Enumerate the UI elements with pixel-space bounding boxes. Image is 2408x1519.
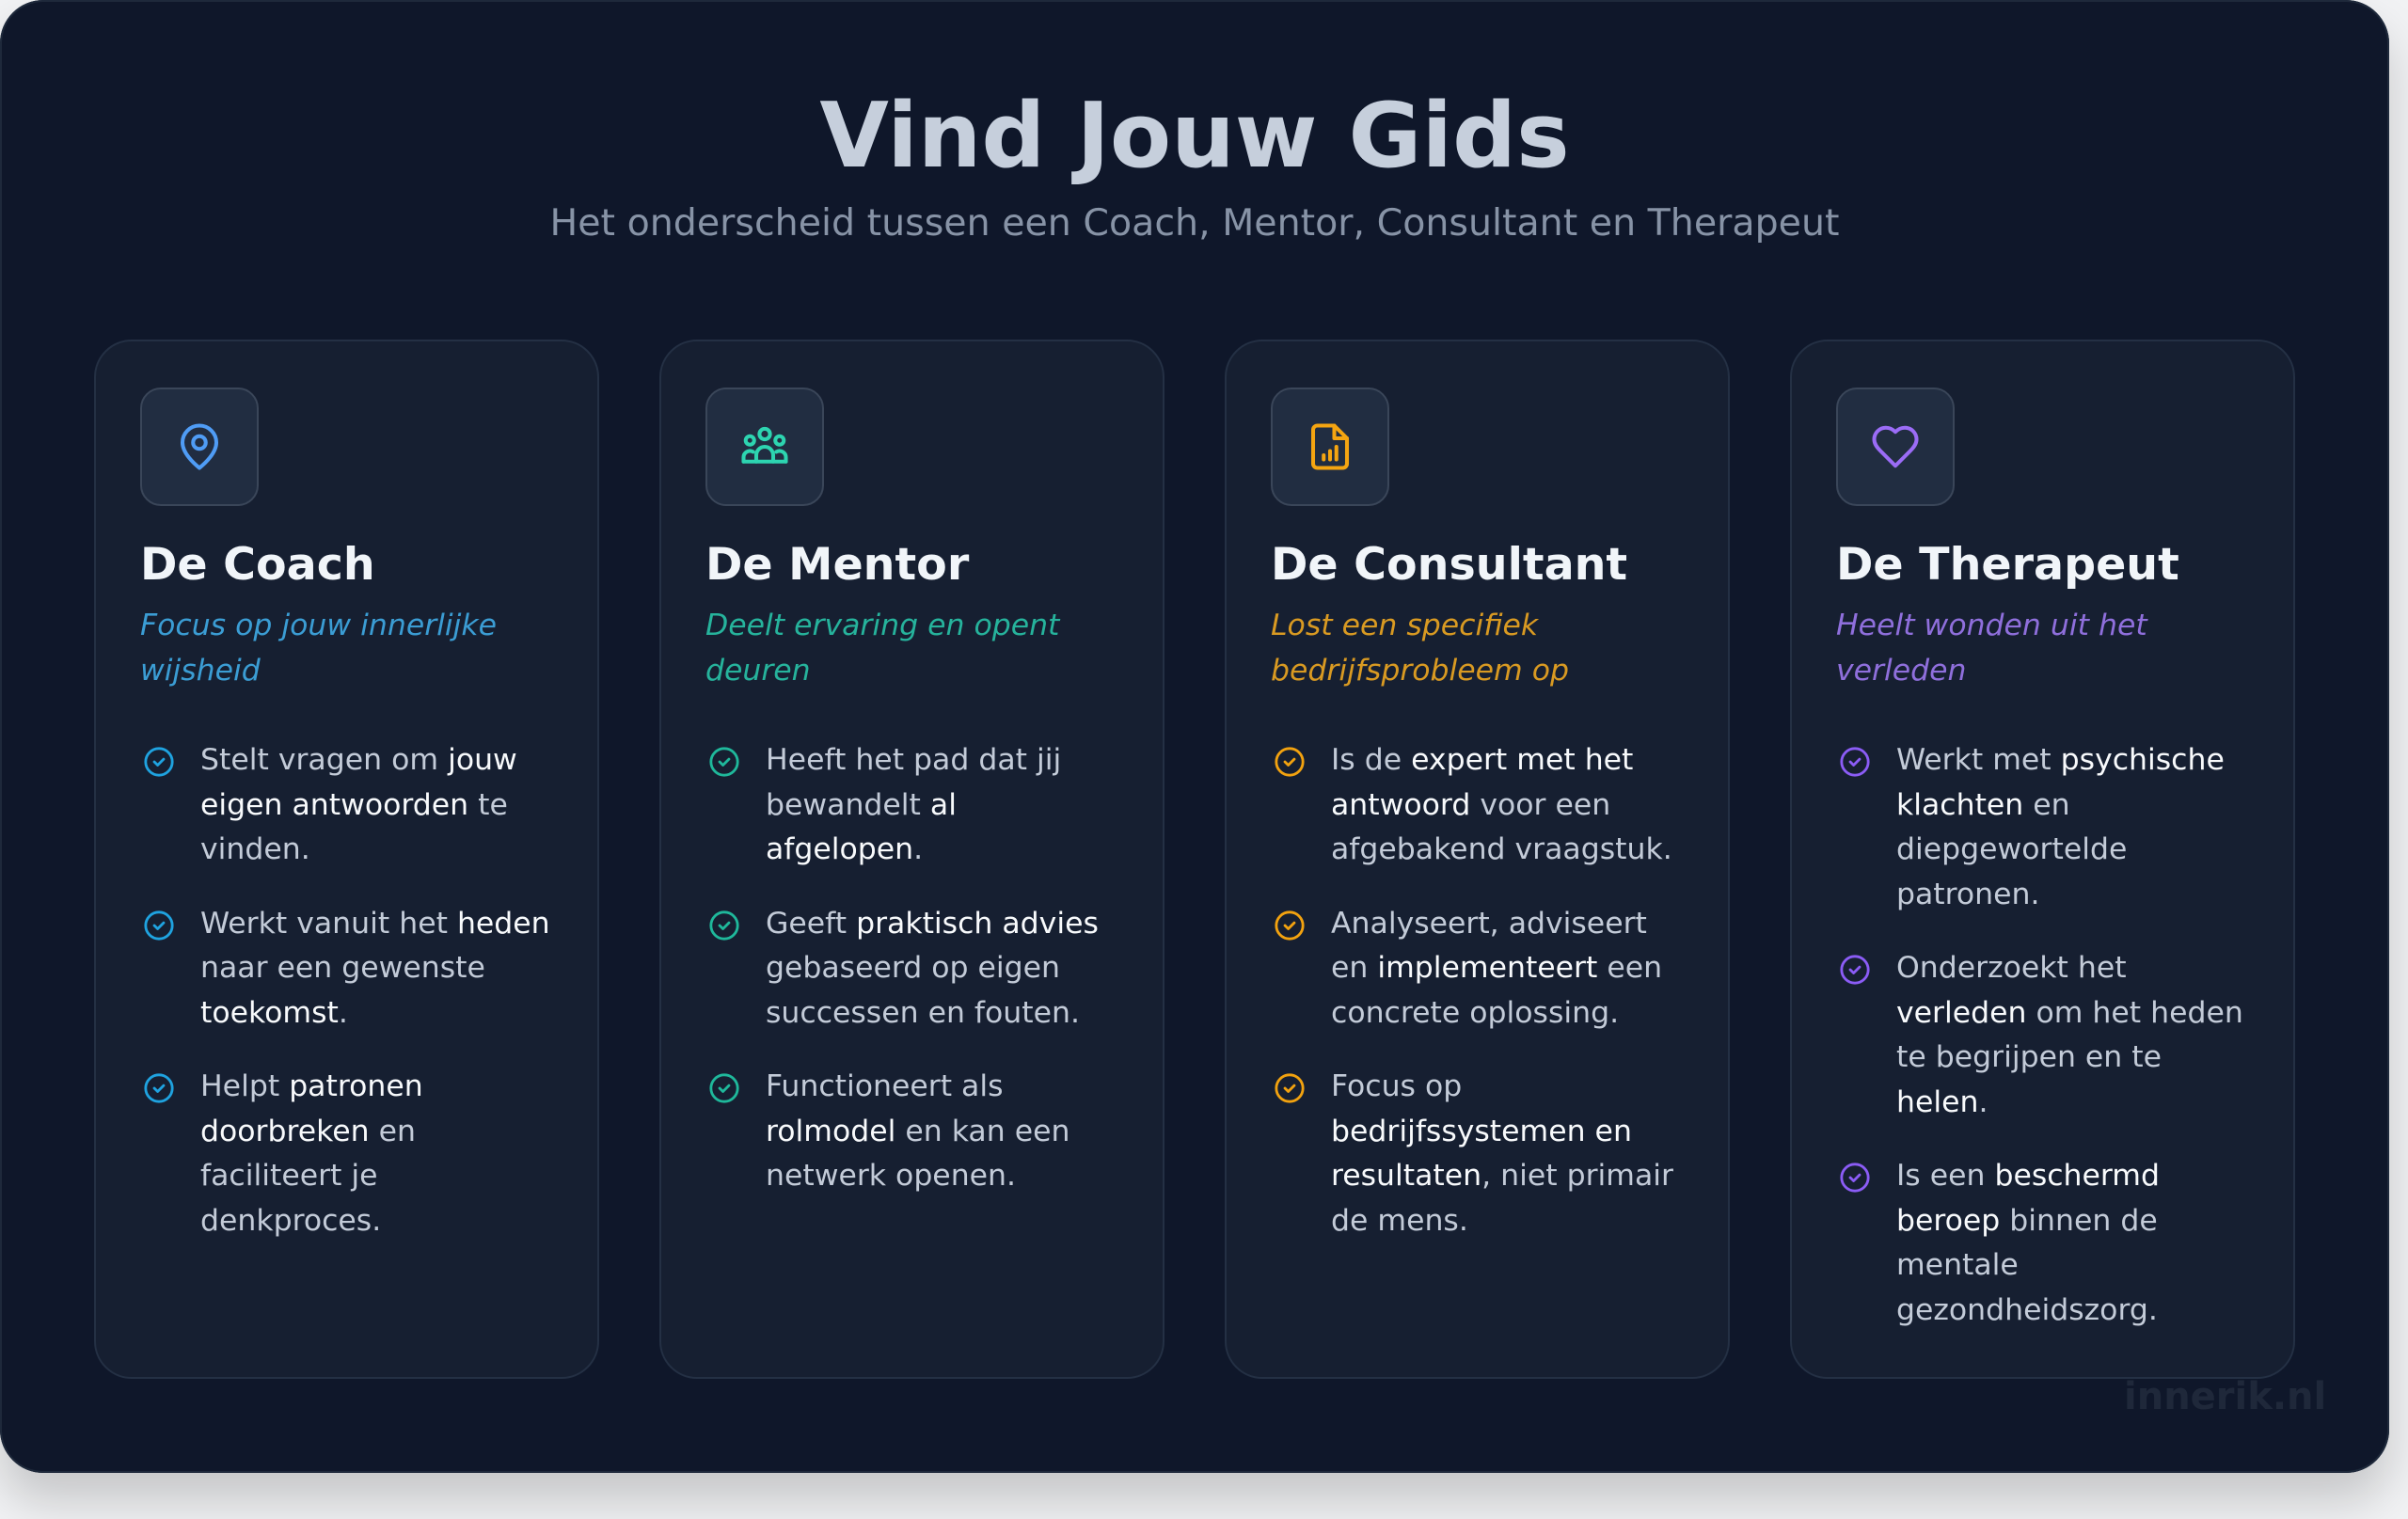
icon: group bbox=[705, 388, 824, 506]
title: Vind Jouw Gids bbox=[819, 85, 1570, 188]
panel: mentor bbox=[659, 340, 1164, 1379]
bullet: Is de expert met het antwoord voor een afgebakend vraagstuk. bbox=[1331, 743, 1672, 866]
icon: heart bbox=[1836, 388, 1955, 506]
icon: location pin bbox=[140, 388, 259, 506]
bullet: Functioneert als rolmodel en kan een netwerk openen. bbox=[766, 1069, 1069, 1193]
list: consultant bbox=[1275, 743, 1673, 1238]
tagline: coach: Focus op jouw innerlijke wijsheid bbox=[140, 609, 497, 687]
bullet: Helpt patronen doorbreken en faciliteert je denkproces. bbox=[200, 1069, 423, 1238]
bullet: Analyseert, adviseert en implementeert een concrete oplossing. bbox=[1331, 907, 1662, 1029]
list: coach bbox=[144, 743, 550, 1238]
subtitle: Het onderscheid tussen een Coach, Mentor, Consultant en Therapeut bbox=[550, 201, 1839, 245]
heading: therapeut: De Therapeut bbox=[1836, 539, 2179, 591]
bullet: Onderzoekt het verleden om het heden te begrijpen en te helen. bbox=[1896, 951, 2243, 1119]
bullet: Is een beschermd beroep binnen de mentale gezondheidszorg. bbox=[1896, 1159, 2160, 1326]
bullet: Focus op bedrijfssystemen en resultaten, niet primair de mens. bbox=[1331, 1069, 1673, 1238]
tagline: therapeut: Heelt wonden uit het verleden bbox=[1836, 609, 2147, 687]
heading: mentor: De Mentor bbox=[705, 539, 969, 591]
bullet: Geeft praktisch advies gebaseerd op eigen successen en fouten. bbox=[766, 907, 1099, 1029]
icon: report document bbox=[1271, 388, 1389, 506]
watermark: innerik.nl bbox=[2124, 1375, 2326, 1418]
tagline: mentor: Deelt ervaring en opent deuren bbox=[705, 609, 1059, 687]
panel: coach bbox=[94, 340, 599, 1379]
list: mentor bbox=[709, 743, 1099, 1193]
list: therapeut bbox=[1840, 743, 2243, 1326]
bullet: Heeft het pad dat jij bewandelt al afgelopen. bbox=[766, 743, 1061, 866]
panel: consultant bbox=[1225, 340, 1730, 1379]
bullet: Stelt vragen om jouw eigen antwoorden te vinden. bbox=[200, 743, 517, 866]
bullet: Werkt met psychische klachten en diepgewortelde patronen. bbox=[1896, 743, 2225, 910]
heading: coach: De Coach bbox=[140, 539, 375, 591]
panel: therapeut bbox=[1790, 340, 2295, 1379]
tagline: consultant: Lost een specifiek bedrijfsprobleem op bbox=[1271, 609, 1569, 687]
heading: consultant: De Consultant bbox=[1271, 539, 1627, 591]
bullet: Werkt vanuit het heden naar een gewenste toekomst. bbox=[200, 907, 550, 1029]
